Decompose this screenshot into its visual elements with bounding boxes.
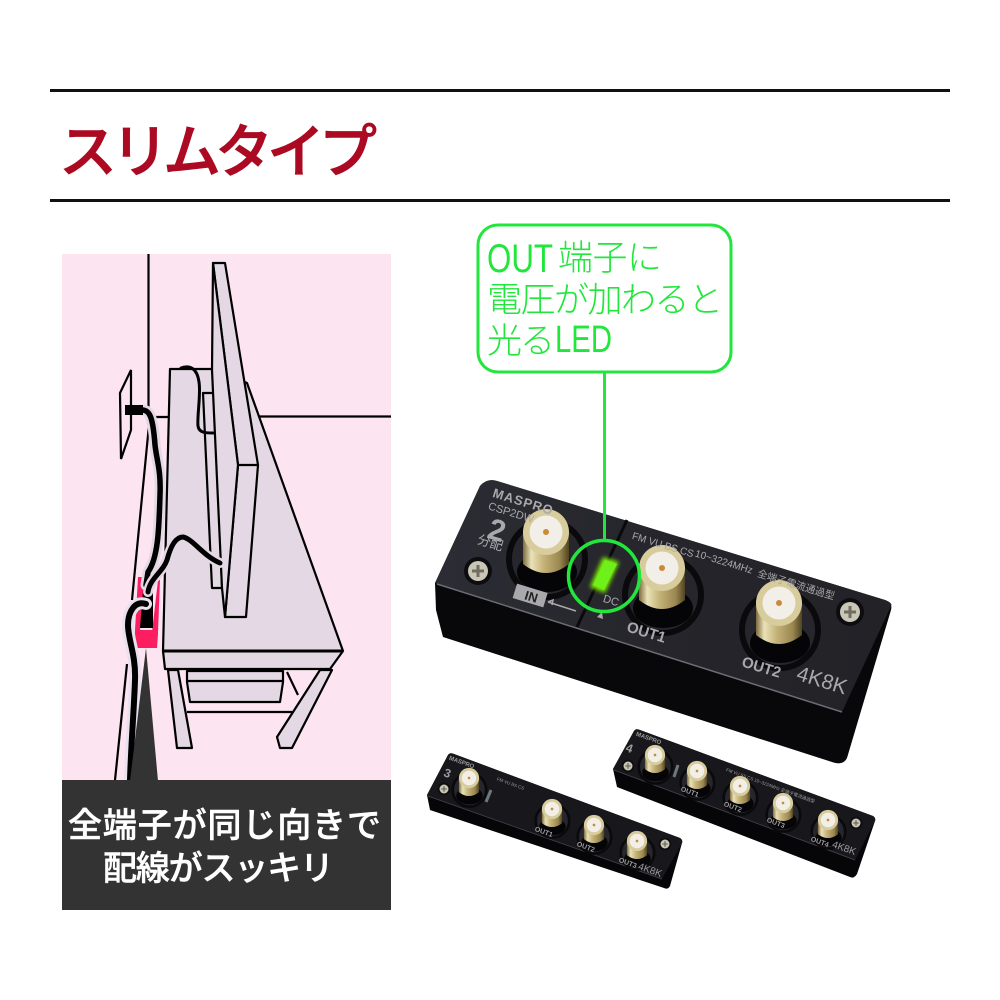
printed labels: 分配 xyxy=(476,532,505,554)
wall outlet xyxy=(120,370,131,459)
pointer to splitter xyxy=(130,648,158,781)
callout: LED xyxy=(478,225,731,372)
printed labels: 10~3224MHz xyxy=(694,549,754,577)
product: 3-way splitter: OUT1 xyxy=(534,826,554,839)
printed labels: OUT1 xyxy=(625,619,668,647)
printed labels: 4K8K xyxy=(794,662,850,699)
printed labels xyxy=(476,485,850,699)
callout: LED: 光る xyxy=(487,322,555,361)
product: 3-way splitter: OUT2 xyxy=(576,841,596,854)
callout: LED: OUT xyxy=(487,237,553,281)
product: 4-way splitter: OUT3 xyxy=(766,817,786,830)
body xyxy=(435,480,891,763)
product: 3-way splitter: 4K8K xyxy=(636,861,664,880)
caption box xyxy=(62,780,391,910)
header rule: bottom xyxy=(50,199,950,202)
product: 3-way splitter: MASPRO xyxy=(448,756,475,770)
LED xyxy=(590,557,619,593)
product: 3-way splitter: OUT3 xyxy=(618,857,638,870)
printed labels: CSP2DW xyxy=(487,501,536,526)
TV xyxy=(203,263,258,617)
printed labels: 2 xyxy=(484,513,510,549)
TV desk xyxy=(163,369,343,748)
printed labels: 全端子電流通過型 xyxy=(756,567,836,603)
printed labels: FM VU BS CS xyxy=(631,531,695,560)
product: 4-way splitter: OUT4 xyxy=(810,836,830,849)
product: 4-way splitter: MASPRO xyxy=(635,732,662,746)
product: 4-way splitter: OUT2 xyxy=(723,801,743,814)
caption box: 全端子が同じ向きで xyxy=(68,807,381,845)
product: 3-way splitter: 3 xyxy=(442,766,453,781)
header rule: top xyxy=(50,89,950,92)
product: 3-way splitter: FM VU BS CS xyxy=(496,776,525,791)
wall plug xyxy=(125,405,143,415)
printed labels: MASPRO xyxy=(491,485,556,518)
callout: LED: LED xyxy=(555,319,612,361)
LED pointer xyxy=(603,372,606,541)
title: スリムタイプ xyxy=(59,120,377,185)
cables xyxy=(128,367,220,780)
screws xyxy=(464,557,492,585)
printed labels: DC xyxy=(602,593,620,609)
product: 4-way splitter xyxy=(613,729,875,878)
product: 4-way splitter: 4 xyxy=(624,741,635,756)
connectors xyxy=(509,509,585,597)
callout: LED: 端子に xyxy=(558,239,662,278)
printed labels: OUT2 xyxy=(740,654,783,682)
product: 4-way splitter: 4K8K xyxy=(830,839,858,858)
room lines xyxy=(115,254,391,780)
panel: wiring illustration xyxy=(62,254,391,910)
product: 4-way splitter: OUT1 xyxy=(680,786,700,799)
pink splitter xyxy=(135,577,160,648)
printed labels: IN xyxy=(523,588,540,606)
callout: LED: 電圧が加わると xyxy=(487,281,723,320)
product: 3-way splitter xyxy=(427,753,682,889)
product: 2-way splitter xyxy=(435,372,891,763)
caption box: 配線がスッキリ xyxy=(103,850,334,888)
product: 4-way splitter: FM VU BS CS 10~3224MHz 全端子電流通過型 xyxy=(725,766,816,805)
